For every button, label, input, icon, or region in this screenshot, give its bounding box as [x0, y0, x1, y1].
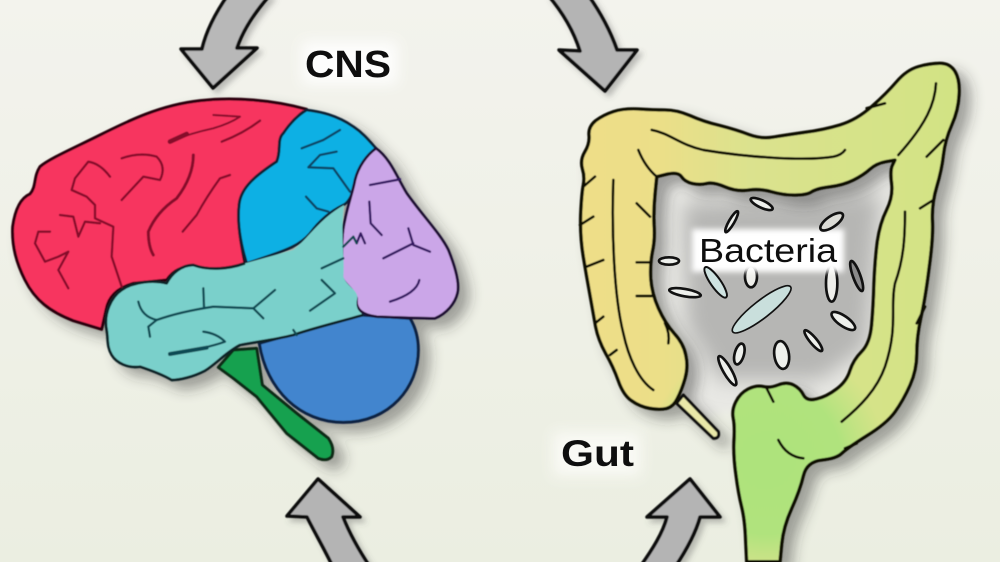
parietal lobe sulci [302, 130, 350, 212]
arrow: brain to gut, top right [548, 0, 637, 91]
arrow: bottom left [287, 479, 370, 562]
label: Bacteria: Bacteria [699, 232, 838, 269]
colon illustration [580, 63, 959, 562]
parietal lobe [239, 110, 376, 263]
colon fold lines [580, 83, 943, 458]
colon outline [581, 63, 959, 562]
bacteria behind label [745, 265, 837, 302]
label highlight patches [302, 42, 844, 476]
label: Gut: Gut [561, 433, 634, 474]
occipital lobe [342, 148, 458, 318]
occipital lobe sulci [357, 179, 430, 302]
temporal lobe [106, 205, 363, 380]
bacteria [659, 196, 866, 387]
frontal lobe sulci [35, 115, 260, 288]
frontal lobe [13, 99, 307, 329]
temporal lobe sulci [138, 237, 357, 354]
temporal lobe outline [106, 263, 363, 380]
colon body fill [581, 63, 959, 562]
rectum green tint [581, 63, 959, 562]
cerebellum [259, 315, 418, 422]
brain illustration [13, 99, 458, 460]
arrow: bottom right [640, 479, 720, 562]
appendix [677, 395, 719, 438]
label: CNS: CNS [305, 44, 391, 86]
brain stem [218, 348, 333, 460]
hollow interior of colon with grey shading [653, 160, 897, 417]
arrow: gut to brain, top left [181, 0, 270, 88]
